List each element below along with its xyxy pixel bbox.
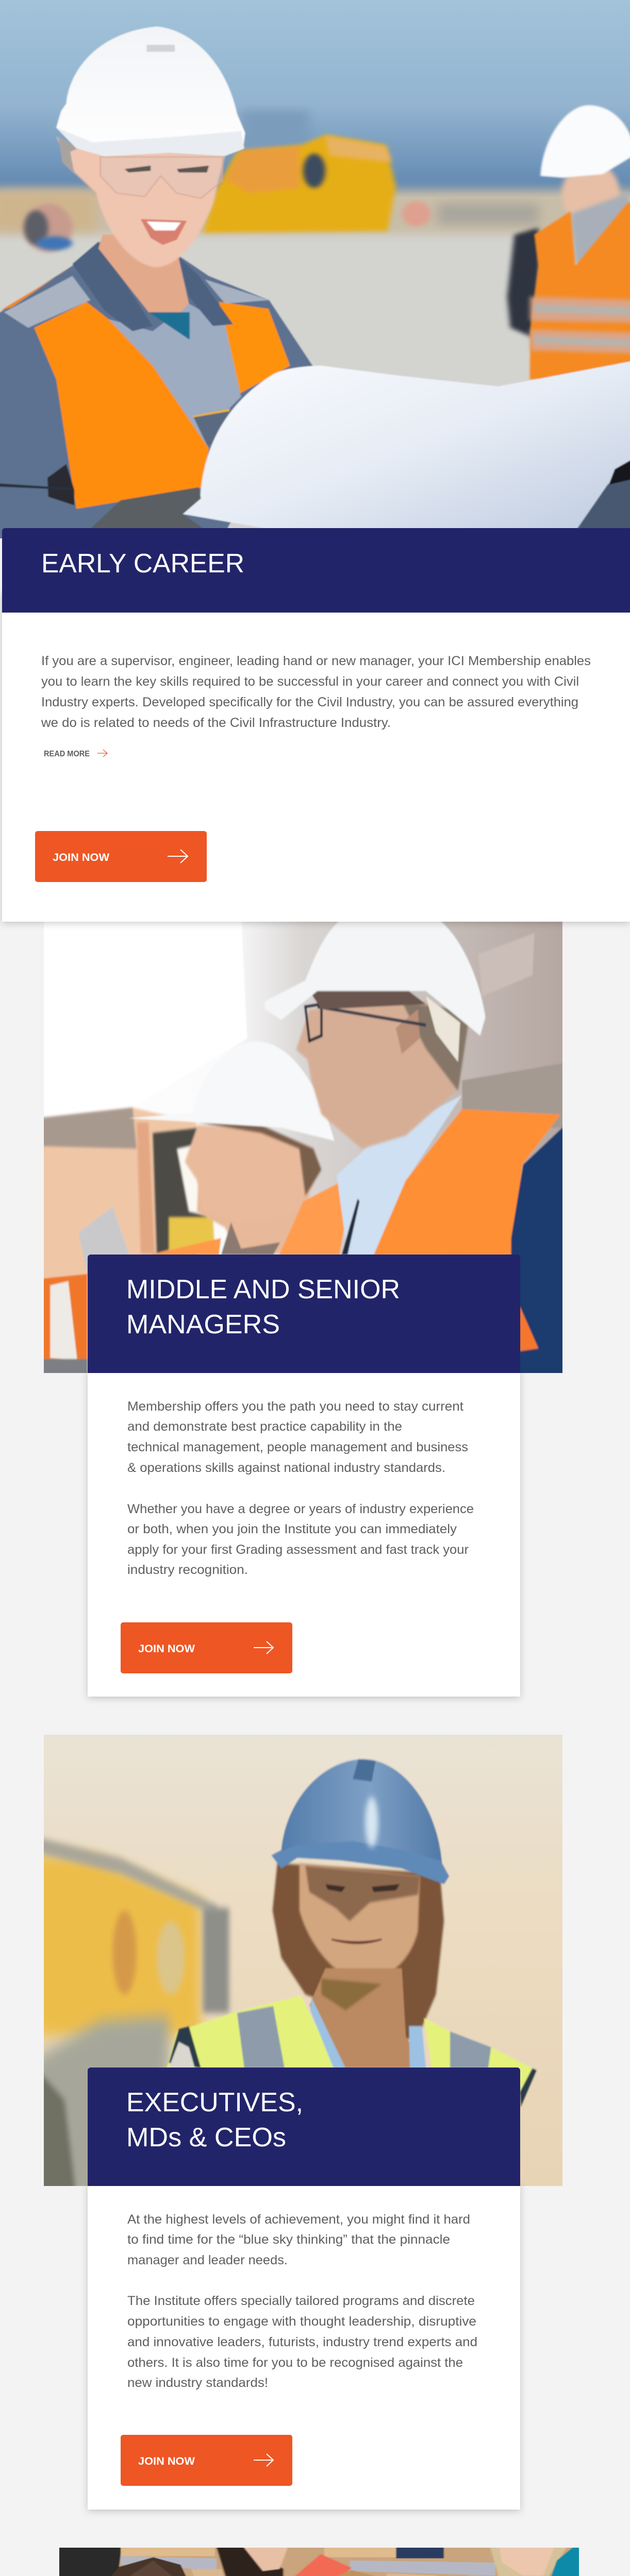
heading: middle and senior managers [126,1275,400,1340]
heading: middle and senior managers: MIDDLE AND SENIOR [126,1275,400,1304]
body text: and demonstrate best practice capability in the [127,1419,402,1434]
body text: & operations skills against national industry standards. [127,1461,445,1475]
photo: students writing an exam [59,2548,579,2576]
icon: read more arrow [97,750,107,757]
icon: button arrow [168,850,188,863]
body text [127,1399,474,1577]
heading: executives, MDs and CEOs [126,2088,303,2153]
body text: new industry standards! [127,2376,268,2390]
icon: button arrow [254,2454,273,2466]
body text [127,2212,477,2390]
panel: executives, MDs and CEOs [44,1735,562,2514]
body text: opportunities to engage with thought leadership, disruptive [127,2314,476,2329]
body text: apply for your first Grading assessment and fast track your [127,1543,469,1557]
body text: manager and leader needs. [127,2253,288,2267]
navy heading band [88,2067,520,2186]
panel: students [59,2548,579,2576]
button: join now: JOIN NOW [138,1643,195,1655]
photo: engineer with hard hat and plans [0,0,630,549]
button: join now [121,1622,292,1673]
body text [41,654,591,730]
body text: If you are a supervisor, engineer, leading hand or new manager, your ICI Membership enables [41,654,591,668]
body text: or both, when you join the Institute you can immediately [127,1522,457,1536]
body text: Industry experts. Developed specifically for the Civil Industry, you can be assured everything [41,695,578,709]
read more link: READ MORE [44,750,90,758]
panel: early career [0,0,630,926]
button: join now: JOIN NOW [53,852,109,863]
body text: technical management, people management and business [127,1440,468,1454]
button: join now [35,831,207,882]
navy heading band [2,528,630,613]
button: join now [121,2435,292,2486]
white content card [2,592,630,922]
body text: we do is related to needs of the Civil Infrastructure Industry. [41,716,391,730]
body text: The Institute offers specially tailored programs and discrete [127,2294,475,2308]
body text: others. It is also time for you to be recognised against the [127,2355,463,2370]
heading: executives, MDs and CEOs: MDs & CEOs [126,2123,286,2153]
body text: At the highest levels of achievement, you might find it hard [127,2212,470,2227]
heading: executives, MDs and CEOs: EXECUTIVES, [126,2088,303,2117]
body text: Whether you have a degree or years of industry experience [127,1502,474,1516]
panel: middle and senior managers [44,922,562,1701]
navy heading band [88,1255,520,1373]
heading: middle and senior managers: MANAGERS [126,1310,280,1340]
icon: button arrow [254,1641,273,1654]
body text: to find time for the “blue sky thinking” that the pinnacle [127,2232,450,2247]
photo: two managers in hard hats [36,912,571,1385]
white content card [88,1370,520,1697]
body text: industry recognition. [127,1563,248,1577]
heading: early career: EARLY CAREER [41,549,244,579]
button: join now: JOIN NOW [138,2455,195,2467]
body text: Membership offers you the path you need to stay current [127,1399,463,1414]
white content card [88,2183,520,2510]
body text: you to learn the key skills required to be successful in your career and connect you with Civil [41,674,579,689]
body text: and innovative leaders, futurists, industry trend experts and [127,2335,477,2349]
photo: woman in blue hard hat [36,1724,571,2197]
